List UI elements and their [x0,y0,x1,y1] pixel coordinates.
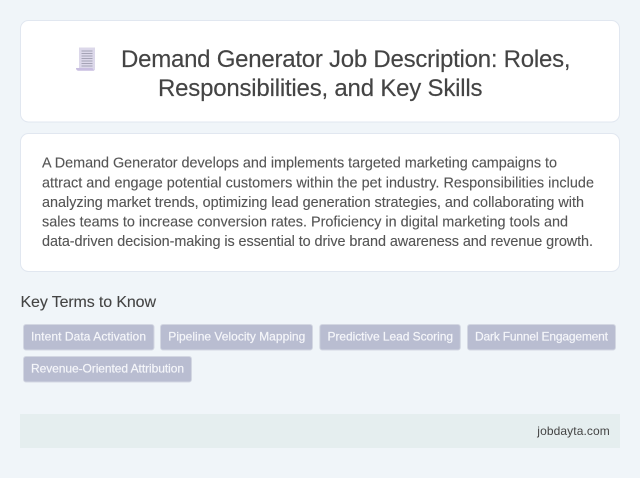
panel: title card [20,20,620,122]
chip: Dark Funnel Engagement [468,324,616,350]
chip: Pipeline Velocity Mapping: Pipeline Velocity Mapping [168,330,305,344]
description text: A Demand Generator develops and implements targeted marketing campaigns to [42,156,557,172]
footer bar [20,414,620,448]
chip: Pipeline Velocity Mapping [160,324,312,350]
panel: description card [20,134,620,272]
chip: Revenue-Oriented Attribution: Revenue-Oriented Attribution [31,362,184,376]
chip: Intent Data Activation [24,324,154,350]
description text: sales teams to increase conversion rates. Proficiency in digital marketing tools and [42,214,568,230]
heading: key terms: Key Terms to Know [20,294,156,311]
description text [42,156,594,250]
description text: data-driven decision-making is essential to drive brand awareness and revenue growth. [42,234,593,250]
chip: Predictive Lead Scoring: Predictive Lead Scoring [328,330,453,344]
footer source: jobdayta.com [536,424,610,438]
title [121,46,570,102]
chip: Predictive Lead Scoring [320,324,460,350]
key term chips [24,324,616,382]
title: Demand Generator Job Description: Roles, [121,46,570,73]
icon: document scroll [76,48,95,71]
chip: Revenue-Oriented Attribution [24,356,192,382]
description text: attract and engage potential customers within the pet industry. Responsibilities include [42,175,594,191]
title: Responsibilities, and Key Skills [158,75,482,102]
chip: Dark Funnel Engagement: Dark Funnel Engagement [475,330,609,344]
description text: analyzing market trends, optimizing lead generation strategies, and collaborating with [42,195,584,211]
chip: Intent Data Activation: Intent Data Activation [31,330,146,344]
